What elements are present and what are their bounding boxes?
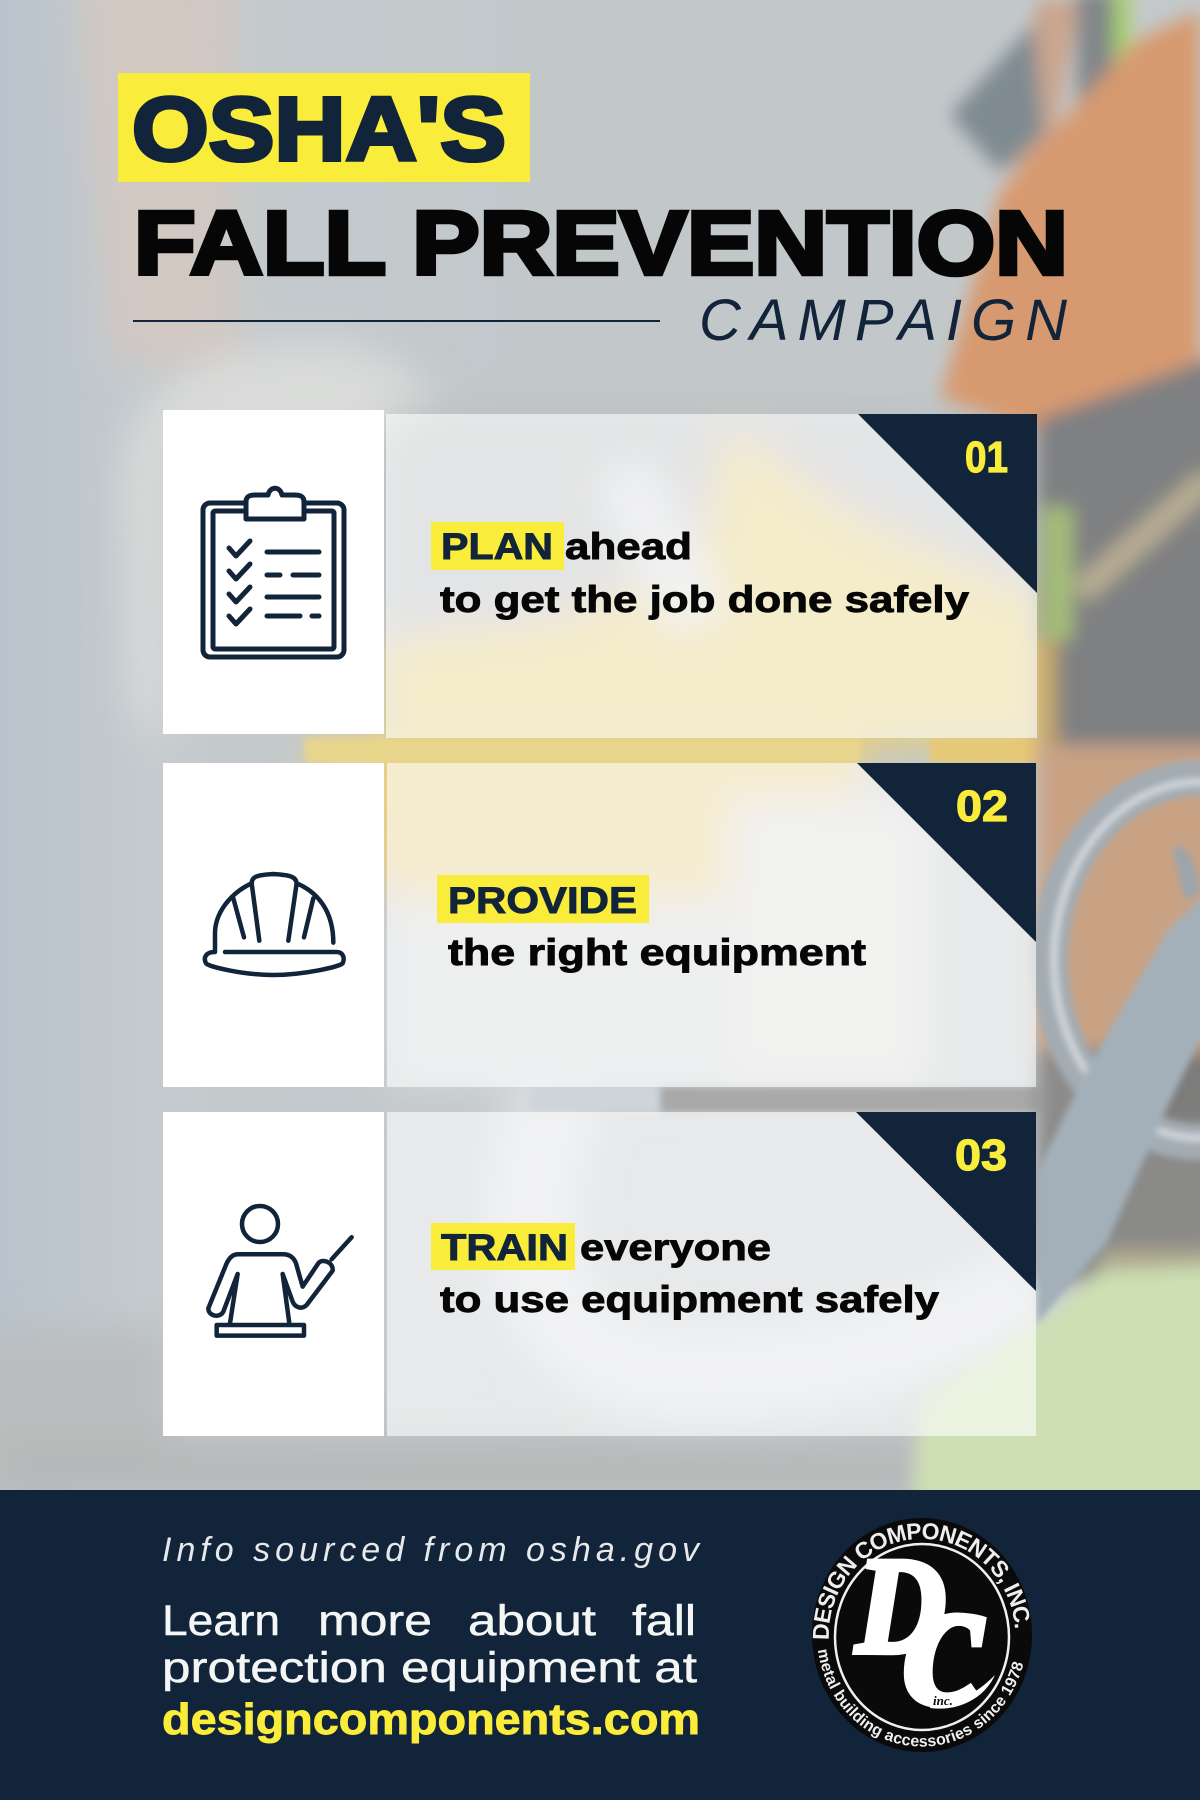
website: designcomponents.com xyxy=(162,1695,700,1744)
card 3: train xyxy=(163,1112,1036,1436)
number corner: 03 xyxy=(955,1131,1007,1180)
card 2: provide xyxy=(163,763,1036,1087)
call to action: protection equipment at xyxy=(162,1644,697,1692)
number corner xyxy=(856,1112,1036,1291)
step text: PLAN xyxy=(441,526,553,567)
translucent panel xyxy=(387,1112,1036,1436)
white icon panel xyxy=(163,1112,384,1436)
step text: PROVIDE xyxy=(448,880,637,921)
number corner: 01 xyxy=(965,433,1008,482)
number corner xyxy=(858,414,1037,593)
number corner: 02 xyxy=(956,782,1008,831)
title highlight: OSHA'S: OSHA'S xyxy=(132,80,506,180)
subtitle: CAMPAIGN with rule: CAMPAIGN xyxy=(699,288,1067,353)
logo: Design Components xyxy=(812,1518,1032,1752)
logo: Design Components: metal building accessories since 1978 xyxy=(818,1649,1023,1747)
title: FALL PREVENTION: FALL PREVENTION xyxy=(134,194,1068,294)
white icon panel xyxy=(163,410,384,734)
source note: Info sourced from osha.gov xyxy=(162,1531,701,1569)
icon: clipboard xyxy=(203,488,344,657)
logo: Design Components: c xyxy=(903,1536,987,1746)
step text xyxy=(437,875,866,973)
white icon panel xyxy=(163,763,384,1087)
card 1: plan xyxy=(163,410,1037,738)
translucent panel xyxy=(387,763,1036,1087)
logo: Design Components: DESIGN COMPONENTS, INC. xyxy=(812,1523,1030,1639)
footer band xyxy=(0,1490,1200,1800)
step text: ahead xyxy=(565,526,692,567)
logo: Design Components: inc. xyxy=(933,1693,953,1708)
call to action xyxy=(162,1597,697,1692)
call to action: about xyxy=(468,1597,596,1645)
step text: to use equipment safely xyxy=(440,1279,939,1320)
icon: hard hat xyxy=(205,874,344,975)
translucent panel xyxy=(386,414,1037,738)
step text: the right equipment xyxy=(448,932,866,973)
icon: trainer with pointer xyxy=(208,1206,352,1336)
step text xyxy=(431,522,969,620)
step text: everyone xyxy=(580,1227,771,1268)
call to action: Learn xyxy=(162,1597,280,1645)
number corner xyxy=(857,763,1036,942)
logo: Design Components: D xyxy=(854,1529,946,1682)
step text: to get the job done safely xyxy=(440,579,969,620)
step text: TRAIN xyxy=(441,1227,568,1268)
step text xyxy=(431,1223,939,1320)
call to action: fall xyxy=(632,1597,696,1645)
call to action: more xyxy=(318,1597,432,1645)
